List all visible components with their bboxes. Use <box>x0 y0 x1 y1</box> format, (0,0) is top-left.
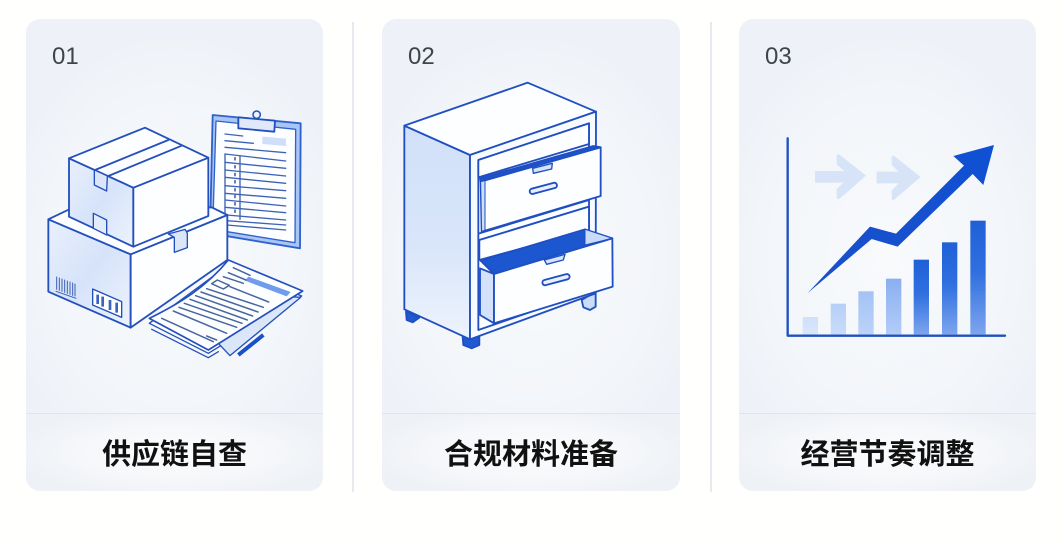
panel footer: 经营节奏调整 <box>739 413 1036 491</box>
top drawer <box>478 123 601 232</box>
document stack and pen <box>149 260 303 358</box>
divider 1 <box>352 22 354 492</box>
panel footer: 供应链自查 <box>26 413 323 491</box>
upper box <box>69 128 208 247</box>
cabinet feet <box>406 292 596 348</box>
barcode label right <box>93 289 122 317</box>
rising arrow <box>807 145 994 293</box>
cabinet body <box>404 83 596 339</box>
clipboard <box>210 111 301 248</box>
panel footer: 供应链自查: 供应链自查 <box>102 439 247 471</box>
chart bars <box>803 221 986 334</box>
panel footer: 合规材料准备: 合规材料准备 <box>444 439 618 471</box>
step number 02: 02 <box>408 43 435 70</box>
barcode label left <box>56 277 76 298</box>
panel footer: 经营节奏调整: 经营节奏调整 <box>800 439 974 471</box>
light process arrows <box>815 154 921 200</box>
chart axes <box>788 138 1005 336</box>
lower box <box>48 207 227 328</box>
illustration: filing cabinet with open drawers <box>404 83 613 348</box>
panel: compliance materials <box>382 19 680 491</box>
panel footer: 合规材料准备 <box>382 413 680 491</box>
illustration: growth bar chart with arrow <box>788 138 1005 336</box>
panel: supply chain self-check <box>26 19 323 491</box>
step number 01: 01 <box>52 43 79 70</box>
panel: operating rhythm <box>739 19 1036 491</box>
bottom drawer <box>479 200 613 323</box>
divider 2 <box>710 22 712 492</box>
step number 03: 03 <box>765 43 792 70</box>
illustration: boxes, clipboard and documents <box>48 111 303 358</box>
